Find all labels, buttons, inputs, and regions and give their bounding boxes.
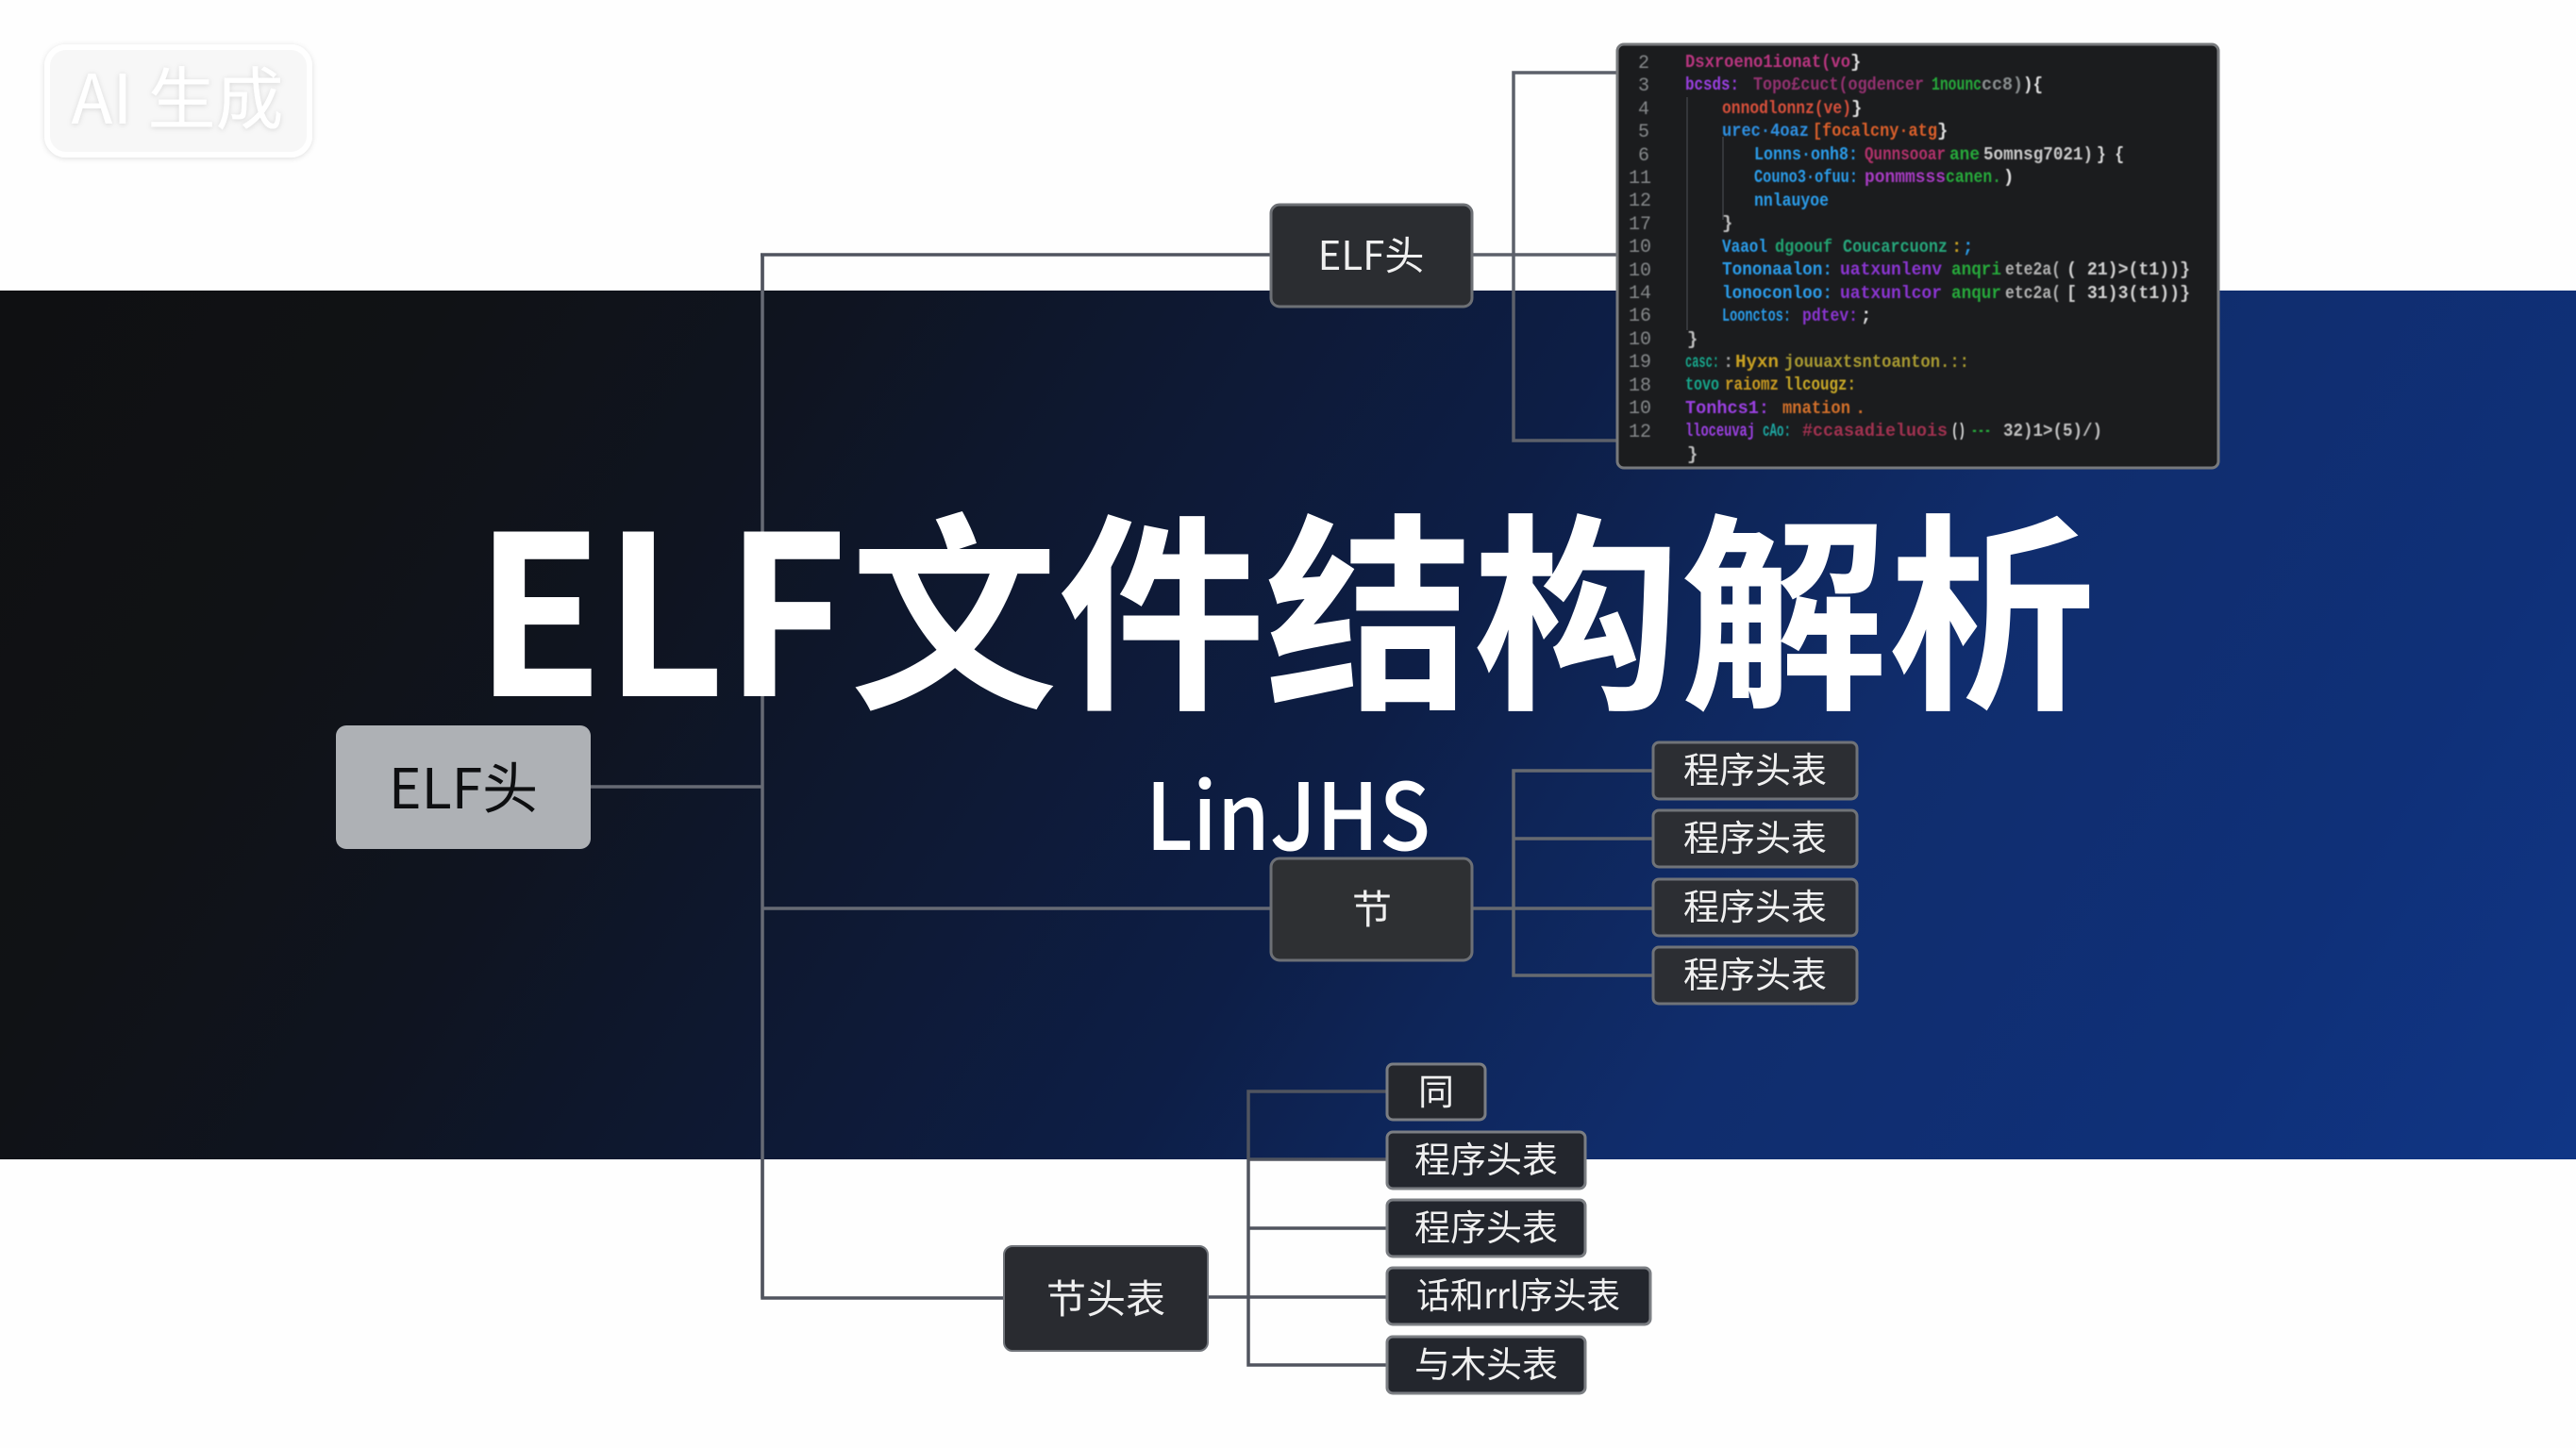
node: 程序头表 1: 程序头表 [1683,741,1827,793]
node: ELF头 top: ELF头 [1318,225,1424,282]
code text: etc2a( [2005,283,2061,304]
code text: jouuaxtsntoanton.:: [1784,352,1969,373]
code text: dgoouf [1775,237,1832,258]
code text: Tonhcs1: [1685,398,1769,419]
code text: Topo£cuct(ogdencer [1753,75,1924,95]
code text: canen. [1946,167,2001,188]
node: 程序头表 B [1387,1199,1585,1257]
code text: } [1687,444,1698,465]
root node: ELF头: ELF头 [389,744,538,824]
code text: ){ [2023,75,2043,95]
node: 与木头表 [1387,1336,1585,1393]
node: 节: 节 [1352,878,1392,936]
node: 程序头表 A [1387,1131,1585,1189]
connector lines: section to program header tables [1472,771,1652,975]
code text: Couno3·ofuu: [1754,167,1858,188]
code text: lloceuvaj [1685,421,1755,441]
node: 程序头表 2 [1653,809,1857,867]
node: 程序头表 4: 程序头表 [1683,946,1827,998]
code line numbers: 12 [1629,191,1651,212]
code text: ; [1963,237,1973,258]
code line numbers: 10 [1629,260,1651,282]
code text: } [1687,329,1698,350]
code text: ponmmsss [1865,167,1946,188]
code text: urec·4oaz [1722,121,1809,141]
code line numbers: 18 [1629,375,1651,397]
code text: 5omnsg7021) [1983,144,2093,165]
root node: ELF头 [336,725,591,849]
node: 话和序头表: 话和rrl序头表 [1416,1267,1620,1319]
title: ELF [475,439,847,760]
code text: } [1851,98,1862,119]
program header table nodes [1653,741,1857,1004]
section header child nodes [1387,1063,1650,1393]
code text: Coucarcuonz [1843,237,1948,258]
code text: } [1850,52,1861,73]
node: 程序头表 1 [1653,741,1857,799]
code text: mnation [1782,398,1850,419]
node: 程序头表 4 [1653,946,1857,1004]
code text: llcougz: [1784,374,1856,395]
code line numbers: 4 [1638,99,1649,121]
code text: } { [2097,144,2124,165]
code text: anqur [1951,283,2001,304]
code line numbers: 14 [1629,283,1651,305]
code text: --- [1971,421,1991,441]
code text: pdtev: [1802,306,1858,326]
node: 同: 同 [1418,1063,1454,1115]
node: 程序头表 B: 程序头表 [1414,1199,1558,1251]
code text: [focalcny·atg [1813,121,1937,141]
code line numbers [1629,53,1651,443]
code line numbers: 10 [1629,237,1651,258]
code line numbers: 5 [1638,122,1649,143]
code text: nnlauyoe [1754,191,1829,211]
connector lines: main tree [591,255,1271,1298]
code text: Hyxn [1735,352,1779,373]
code text: Lonns·onh8: [1754,144,1858,165]
code text: bcsds: [1685,75,1739,95]
code line numbers: 3 [1638,75,1649,97]
code text: uatxunlenv [1840,259,1943,280]
connector lines: section header table to children [1208,1091,1386,1365]
node: 程序头表 3: 程序头表 [1683,878,1827,930]
code text: : [1723,352,1733,373]
node: 节 [1271,858,1472,960]
code text: tovo [1685,374,1719,395]
code line numbers: 16 [1629,306,1651,327]
code text: ( 21)>(t1))} [2066,259,2190,280]
code text [1685,52,2190,465]
node: 程序头表 2: 程序头表 [1683,809,1827,861]
code text: : [1951,237,1962,258]
code text: } [1722,213,1732,234]
code text: Qunnsooar [1865,144,1946,165]
code line numbers: 19 [1629,352,1651,374]
code line numbers: 12 [1629,422,1651,443]
code line numbers: 17 [1629,214,1651,236]
code text: ; [1861,306,1871,326]
connector lines: ELF header to code [1472,73,1616,441]
code text: casc: [1685,352,1719,373]
code text: cAo: [1763,421,1791,441]
code line numbers: 11 [1629,168,1651,190]
code text: uatxunlcor [1840,283,1942,304]
watermark: AI 生成: AI 生成 [71,44,284,143]
title: 文件结构解析 [850,448,2096,753]
node: 同 [1387,1063,1485,1120]
code text: #ccasadieluois [1802,421,1948,441]
node: 程序头表 A: 程序头表 [1414,1131,1558,1183]
code text: raiomz [1725,374,1779,395]
node: 节头表 [1004,1246,1208,1351]
code line numbers: 6 [1638,145,1649,167]
code text: Loonctos: [1722,306,1791,326]
code line numbers: 10 [1629,329,1651,351]
node: 节头表: 节头表 [1046,1268,1165,1325]
code text: 32)1>(5)/) [2003,421,2102,441]
code line numbers: 2 [1638,53,1649,75]
code text: . [1855,398,1865,419]
subtitle: LinJHS: LinJHS [1146,743,1430,877]
code text: 1nounc [1932,75,1982,95]
code text: ane [1949,144,1980,165]
code text: anqri [1951,259,2001,280]
code line numbers: 10 [1629,398,1651,420]
code text: Vaaol [1722,237,1767,258]
code text: Tononaalon: [1722,259,1832,280]
code text: [ 31)3(t1))} [2066,283,2190,304]
dark gradient band [0,291,2576,1159]
code text: () [1951,421,1965,441]
node: 与木头表: 与木头表 [1414,1336,1558,1388]
panel: code screenshot [1617,44,2218,468]
code text: ) [2003,167,2014,188]
code text: onnodlonnz(ve) [1722,98,1851,119]
code text: ete2a( [2005,259,2061,280]
code text: cc8) [1982,75,2023,95]
code text: lonoconloo: [1722,283,1832,304]
node: 程序头表 3 [1653,878,1857,936]
node: ELF头 top [1271,205,1472,307]
code text: } [1937,121,1948,141]
code text: Dsxroeno1ionat(vo [1685,52,1850,73]
